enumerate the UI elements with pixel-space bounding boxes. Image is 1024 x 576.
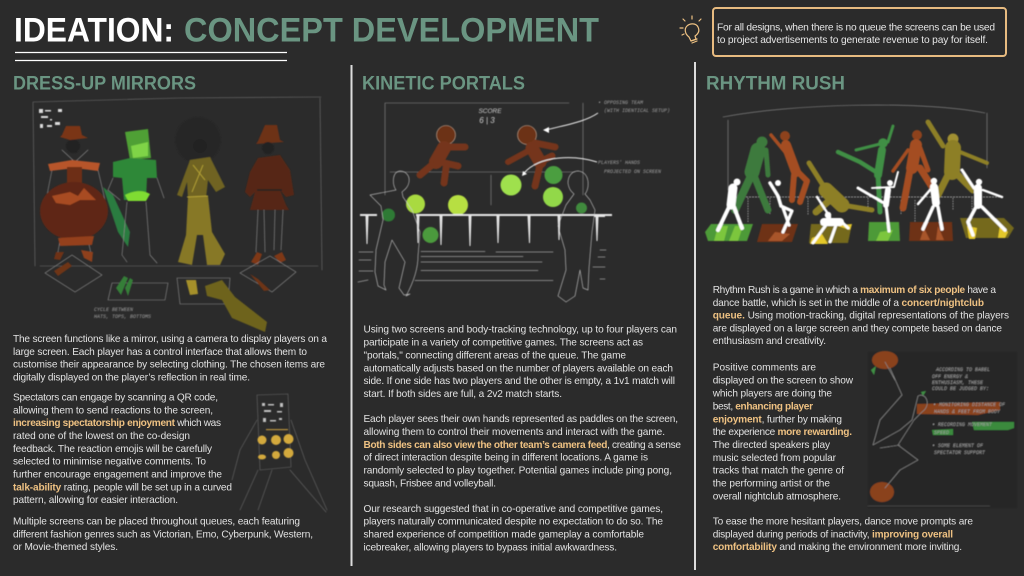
handwritten note: OFF ENERGY & bbox=[932, 374, 968, 380]
handwritten note: CYCLE BETWEEN bbox=[94, 307, 133, 313]
sketch: dance pose annotation bbox=[868, 351, 1017, 508]
handwritten note: HANDS & FEET FROM BODY bbox=[934, 409, 1001, 415]
title: IDEATION: bbox=[14, 12, 174, 50]
text: spectators: pattern, allowing for easier interaction. bbox=[13, 495, 178, 506]
callout: advertising revenue note: to project advertisements to generate revenue to pay for itself. bbox=[717, 35, 988, 46]
text: rhythm rush intro: are displayed on a large screen and they compete based on dance bbox=[713, 324, 1002, 334]
heading: dress-up mirrors: DRESS-UP MIRRORS bbox=[13, 74, 196, 94]
text: research: shared experience of competition made gameplay a comfortable bbox=[364, 530, 644, 540]
hand paddles bbox=[382, 166, 587, 243]
handwritten notes bbox=[598, 100, 670, 175]
text: paddles and camera feed: of direct interaction despite being in different locations. A game is bbox=[364, 453, 648, 464]
railing bbox=[360, 214, 612, 246]
stage rail bbox=[740, 196, 1000, 198]
panel: dress-up mirrors bbox=[13, 74, 327, 553]
handwritten note: SPEED bbox=[934, 430, 949, 436]
text: paddles and camera feed: randomly selected to play together. Potential games include ping pong, bbox=[364, 466, 672, 476]
handwritten note: COULD BE JUDGED BY: bbox=[932, 386, 989, 392]
handwritten notes: PROJECTED ON SCREEN bbox=[604, 169, 661, 175]
text: paddles and camera feed: squash, Frisbee and volleyball. bbox=[364, 478, 496, 489]
scoreboard: 6 | 3 bbox=[479, 116, 495, 125]
brown opponent left bbox=[420, 126, 465, 183]
sketch: phone with reaction emojis bbox=[232, 394, 327, 512]
text: rhythm rush intro: queue. Using motion-tracking, digital representations of the players bbox=[713, 311, 1009, 322]
text: dance prompts: comfortability and making the environment more inviting. bbox=[713, 542, 962, 553]
handwritten note bbox=[94, 307, 151, 320]
text: spectators: allowing them to send reactions to the screen, bbox=[13, 405, 213, 416]
sketch: kinetic portal game bbox=[358, 100, 670, 302]
handwritten note: • MONITORING DISTANCE OF bbox=[933, 402, 1006, 408]
text: spectators: feedback. The reaction emojis will be carefully bbox=[13, 444, 213, 455]
players outlines bbox=[370, 171, 420, 296]
handwritten note: ACCORDING TO BABEL bbox=[935, 367, 990, 373]
text: spectators: Spectators can engage by scanning a QR code, bbox=[13, 392, 218, 404]
figure: victorian dress bbox=[40, 126, 108, 262]
handwritten note: • RECORDING MOVEMENT bbox=[932, 422, 993, 428]
text: rhythm rush intro: dance battle, which is set in the middle of a concert/nightclub bbox=[713, 298, 984, 309]
text: multiple screens: different fashion genres such as Victorian, Emo, Cyberpunk, Western, bbox=[13, 529, 313, 540]
text: portals description: Using two screens and body-tracking technology, up to four players can bbox=[364, 324, 677, 336]
text: multiple screens: or Movie-themed styles. bbox=[13, 542, 118, 553]
handwritten note: ENTHUSIASM, THESE bbox=[932, 380, 984, 386]
colored dancers bbox=[735, 122, 987, 212]
title underline bbox=[15, 52, 287, 60]
control panels bbox=[45, 255, 296, 304]
text: spectators: rated one of the lowest on the co-design bbox=[13, 431, 190, 442]
text: positive comments: enjoyment, further by making bbox=[713, 414, 842, 426]
arrow: to hands bbox=[522, 158, 597, 176]
panel: rhythm rush bbox=[705, 74, 1017, 553]
text: paddles and camera feed: Each player sees their own hands represented as paddles on the screen, bbox=[364, 414, 678, 425]
text: positive comments: best, enhancing player bbox=[713, 402, 813, 412]
text: spectators: further encourage engagement and improve the bbox=[13, 470, 222, 480]
handwritten note: HATS, TOPS, BOTTOMS bbox=[94, 314, 151, 320]
figure: western costume bbox=[245, 125, 294, 265]
callout: advertising revenue note bbox=[713, 8, 1006, 56]
text: mirror description: large screen. Each player has a control interface that allows them to bbox=[13, 347, 307, 358]
hand on panel bbox=[205, 280, 267, 332]
text: spectators: selected to minimise negative comments. To bbox=[13, 457, 206, 468]
text: rhythm rush intro: enthusiasm and creativity. bbox=[713, 336, 826, 347]
text: mirror description: The screen functions like a mirror, using a camera to display players on a bbox=[13, 334, 327, 345]
handwritten notes: PLAYERS' HANDS bbox=[598, 160, 640, 166]
white dancers bbox=[718, 170, 1005, 243]
text: mirror description bbox=[13, 334, 327, 384]
QR code bbox=[39, 109, 62, 128]
text: paddles and camera feed bbox=[364, 414, 681, 489]
icon: light bulb bbox=[680, 16, 701, 43]
sketch: rhythm rush stage bbox=[705, 105, 1014, 244]
text: portals description: start. If both sides are full, a 2v2 match starts. bbox=[364, 389, 562, 400]
handwritten notes: • OPPOSING TEAM bbox=[598, 100, 644, 106]
text: positive comments: the experience more rewarding. bbox=[713, 427, 852, 438]
callout: advertising revenue note: For all designs, when there is no queue the screens can be used bbox=[717, 22, 995, 33]
text: portals description: participate in a variety of competitive games. The screens act as bbox=[364, 338, 643, 348]
text: spectators bbox=[13, 392, 232, 506]
scoreboard bbox=[478, 108, 502, 125]
text: mirror description: customise their appearance by selecting clothing. The chosen items are bbox=[13, 360, 325, 371]
text: positive comments: the performing artist or the bbox=[713, 478, 830, 490]
title bbox=[14, 12, 599, 50]
column dividers bbox=[350, 62, 696, 570]
text: dance prompts: To ease the more hesitant players, dance move prompts are bbox=[713, 516, 973, 528]
text: positive comments: overall nightclub atmosphere. bbox=[713, 491, 841, 502]
text: research: icebreaker, allowing players to bypass initial awkwardness. bbox=[364, 542, 617, 553]
figure: frankenstein costume bbox=[103, 129, 164, 263]
panel: kinetic portals bbox=[358, 74, 681, 553]
text: portals description: "portals," connecting different areas of the queue. The game bbox=[364, 350, 626, 362]
text: paddles and camera feed: allowing them to control their movements and interact with the game. bbox=[364, 427, 665, 438]
scoreboard: SCORE bbox=[478, 108, 502, 115]
text: positive comments: tracks that match the genre of bbox=[713, 466, 844, 477]
text: multiple screens: Multiple screens can be placed throughout queues, each featuring bbox=[13, 516, 300, 528]
text: paddles and camera feed: Both sides can also view the other team’s camera feed, creating a sense bbox=[364, 440, 681, 451]
text: positive comments bbox=[712, 362, 854, 502]
arrow: to opposing team bbox=[543, 113, 598, 133]
text: rhythm rush intro bbox=[713, 285, 1009, 347]
handwritten notes: (WITH IDENTICAL SETUP) bbox=[604, 108, 670, 114]
text: research bbox=[364, 504, 663, 553]
handwritten note bbox=[932, 367, 1006, 456]
handwritten note: SPECTATOR SUPPORT bbox=[934, 450, 986, 456]
heading: rhythm rush: RHYTHM RUSH bbox=[706, 74, 845, 94]
text: portals description: automatically adjusts based on the number of players available on each bbox=[364, 364, 673, 374]
text: spectators: increasing spectatorship enjoyment which was bbox=[13, 418, 221, 429]
heading: kinetic portals: KINETIC PORTALS bbox=[362, 74, 525, 94]
text: positive comments: The directed speakers play bbox=[713, 440, 831, 451]
sketch: mirror screen with four costumed figures bbox=[33, 97, 322, 332]
text: positive comments: music selected from popular bbox=[713, 453, 837, 464]
text: positive comments: which players are doing the bbox=[712, 388, 832, 400]
figure: disco costume bbox=[175, 117, 225, 265]
text: dance prompts bbox=[713, 516, 973, 553]
podiums bbox=[705, 218, 1014, 244]
text: positive comments: Positive comments are bbox=[713, 362, 816, 374]
handwritten note: • SOME ELEMENT OF bbox=[932, 443, 984, 449]
text: portals description: side. If one side has two players and the other is empty, a 1v1 match will bbox=[364, 376, 675, 387]
text: research: Our research suggested that in co-operative and competitive games, bbox=[364, 504, 663, 515]
text: research: players naturally communicated despite no expectation to do so. The bbox=[364, 517, 663, 528]
text: multiple screens bbox=[13, 516, 313, 553]
floor lines bbox=[358, 250, 606, 282]
title: CONCEPT DEVELOPMENT bbox=[184, 12, 599, 50]
text: positive comments: displayed on the screen to show bbox=[713, 376, 854, 386]
brown opponent right bbox=[508, 126, 555, 186]
text: spectators: talk-ability rating, people will be set up in a curved bbox=[13, 482, 232, 493]
text: mirror description: digitally displayed on the player’s reflection in real time. bbox=[13, 372, 250, 384]
text: rhythm rush intro: Rhythm Rush is a game in which a maximum of six people have a bbox=[713, 285, 996, 296]
text: portals description bbox=[364, 324, 677, 400]
text: dance prompts: displayed during periods of inactivity, improving overall bbox=[713, 529, 953, 540]
